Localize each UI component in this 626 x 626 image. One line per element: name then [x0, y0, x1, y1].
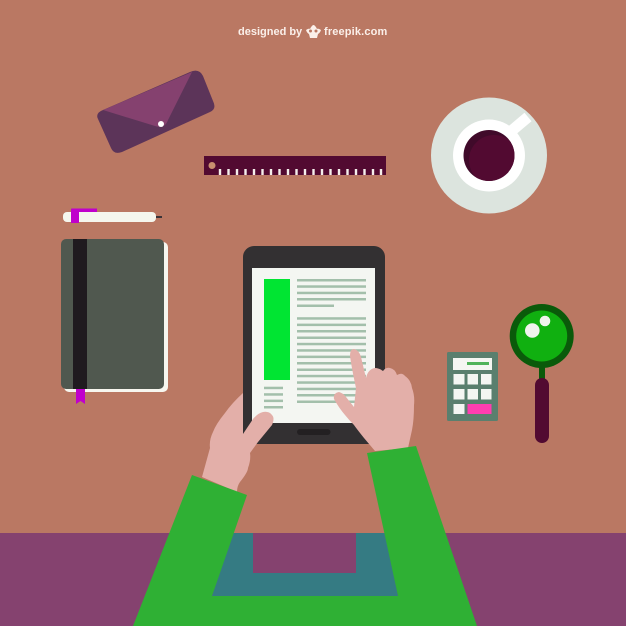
tablet image block: [264, 279, 290, 380]
table edge: [0, 533, 626, 626]
mat cut-out: [253, 533, 356, 573]
icon: wallet: [97, 71, 214, 153]
attribution: freepik.com: [324, 26, 387, 38]
icon: magnifying glass: [510, 304, 574, 443]
tablet: [243, 246, 385, 444]
icon: pen: [63, 208, 162, 223]
right hand: [334, 349, 414, 451]
teal tablet mat: [212, 533, 398, 596]
tablet home button: [297, 429, 330, 435]
icon: calculator: [447, 352, 498, 421]
icon: notebook: [61, 239, 168, 404]
tablet text lines: [264, 279, 366, 408]
icon: ruler: [204, 156, 386, 175]
icon: coffee cup on saucer: [431, 98, 547, 214]
person: green sleeves and torso: [133, 446, 477, 626]
attribution: [238, 25, 387, 38]
left hand: [202, 393, 274, 492]
attribution: designed by: [238, 26, 303, 38]
